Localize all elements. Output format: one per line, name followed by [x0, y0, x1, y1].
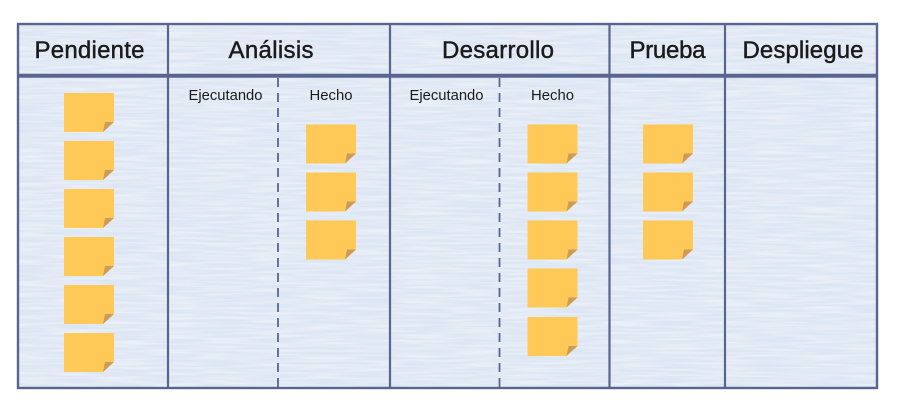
subheading: Desarrollo Ejecutando: Ejecutando	[410, 88, 484, 104]
sticky notes: Pendiente	[64, 93, 114, 372]
subheading: Análisis Hecho: Hecho	[310, 88, 352, 104]
heading: Pendiente: Pendiente	[34, 37, 144, 64]
sticky notes: Análisis Hecho	[306, 124, 356, 260]
sticky notes: Prueba	[643, 124, 693, 260]
subheading: Análisis Ejecutando: Ejecutando	[188, 88, 262, 104]
heading: Análisis: Análisis	[228, 37, 314, 64]
subheading: Desarrollo Hecho: Hecho	[531, 88, 574, 104]
heading: Prueba: Prueba	[630, 37, 706, 64]
heading: Desarrollo: Desarrollo	[442, 37, 554, 64]
sticky notes: Desarrollo Hecho	[528, 124, 578, 356]
heading: Despliegue: Despliegue	[742, 37, 864, 64]
